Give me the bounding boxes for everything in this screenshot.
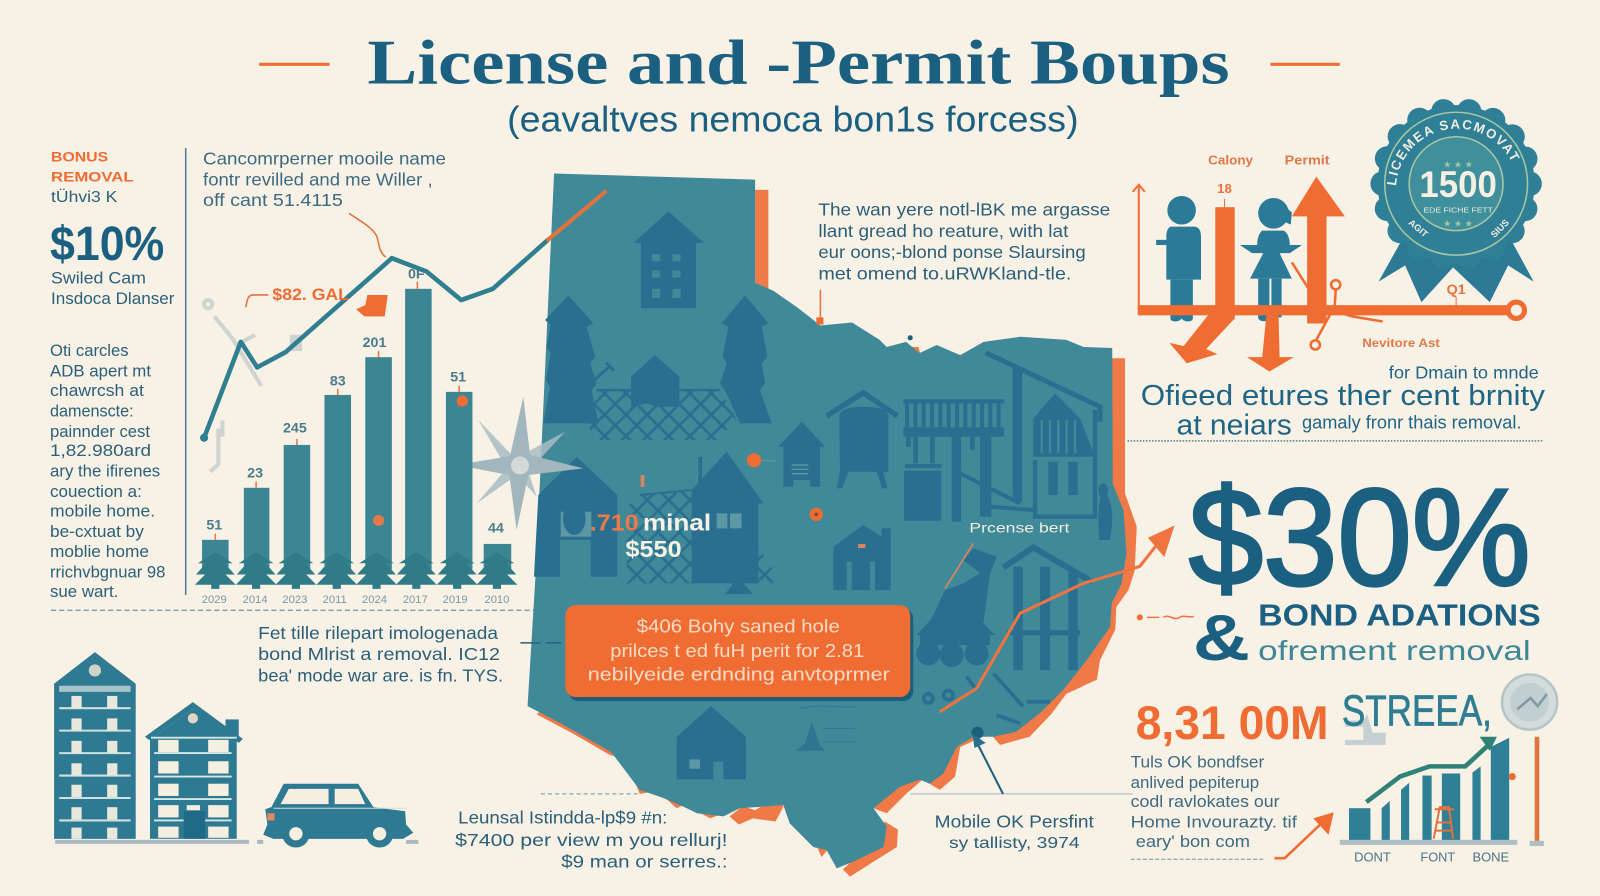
text block: fet tille: Fet tille rilepart imologenada [258,623,498,643]
orange pole [1530,737,1544,846]
mini chart dot [1509,773,1516,780]
left paragraph [50,342,165,601]
illustration: apartment house [145,702,243,839]
year labels: 2019 [443,594,468,606]
seal stars [1443,159,1473,229]
orange bar with down arrow [1169,207,1235,363]
structure: slat frame [903,368,1022,522]
text block: for dmain: for Dmain to mnde [1389,363,1539,383]
bar value labels: 201 [363,335,386,351]
year labels: 2014 [243,594,268,606]
map label: minal: .710 [590,510,639,536]
seal bottom labels: SIUS [1489,217,1511,240]
bar value labels: 0F [408,267,425,283]
text block: for dmain: gamaly fronr thais removal. [1302,412,1521,433]
trend line [200,192,605,442]
bar chart [195,267,517,606]
bar value labels: 245 [283,421,307,437]
big up arrow [1292,177,1345,324]
text block: mobile ok: sy tallisty, 3974 [949,835,1080,852]
left paragraph: painnder cest [50,423,150,441]
text block: for dmain: at neiars [1177,410,1292,442]
text block: mobile ok [935,812,1094,852]
map label: minal: $550 [626,536,682,562]
left paragraph: couection a: [50,483,142,501]
tree row under bars [195,552,517,589]
illustration: car [263,784,413,847]
stamp [1502,675,1557,730]
left paragraph: damenscte: [50,402,134,420]
dash connector to box [520,642,561,644]
seal stars: ★ ★ ★ [1443,159,1473,169]
year labels [202,594,509,606]
illustration: tall building [54,652,136,839]
map label: prcense bert: Prcense bert [969,521,1069,537]
chart intro text [203,148,446,210]
label: 18 [1217,181,1232,207]
stat caption: Insdoca Dlanser [51,290,175,308]
left paragraph: mobile home. [50,502,155,520]
mini chart labels: FONT [1420,849,1455,864]
map of state [528,174,1127,868]
seal [1383,110,1530,257]
seal sub text: EDE FICHE FETT [1423,206,1494,214]
left paragraph: rrichvbgnuar 98 [50,564,165,582]
diagonal accent [945,543,973,588]
left paragraph: chawrcsh at [50,382,144,400]
fence lattice upper [580,390,737,440]
text block: tuls ok: anlived pepiterup [1131,774,1259,792]
bar value labels [206,267,504,537]
icon: house lower [692,452,763,594]
structure: gantry beam [986,353,1100,422]
callout tick [816,290,823,325]
orange callout box: prilces t ed fuH perit for 2.81 [610,640,864,661]
bar value labels: 51 [206,518,222,534]
left paragraph: 1,82.980ard [50,442,151,460]
compass star [457,397,583,530]
mini chart labels: DONT [1354,849,1391,864]
text block: right of map: eur oons;-blond ponse Slaursing [818,242,1086,262]
bars [202,289,511,570]
callout: $82 gal: $82. GAL [272,286,349,304]
icon: house bottom [677,706,746,779]
big stat: 30 percent: $30% [1189,461,1531,615]
label: permit: Permit [1285,152,1330,167]
ribbon tails [1379,219,1534,302]
bar value labels: 83 [330,374,346,390]
text block: leunsal: $9 man or serres.: [561,851,728,871]
bar value ticks [215,282,459,540]
callout: $82 gal [246,286,388,316]
left paragraph: ary the ifirenes [50,463,160,481]
icon: tree left [543,295,598,423]
bonus removal label [51,149,134,206]
text block: right of map: llant gread ho reature, with lat [818,221,1069,241]
bar value labels: 44 [488,521,504,537]
year labels: 2011 [323,594,347,606]
subtitle: (eavaltves nemoca bon1s forcess) [507,100,1079,140]
year labels: 2024 [362,594,387,606]
seal bottom labels [1407,217,1511,240]
map marker dots [747,335,913,521]
ring end [1508,302,1524,318]
arrow: mobile ok pointer [971,727,1003,794]
diagram: people and arrows [1133,152,1524,371]
faint house icon [1345,714,1386,745]
mini chart labels: BONE [1472,849,1509,864]
text block: tuls ok: Home Invourazty. tif [1131,814,1297,832]
year labels: 2017 [403,594,428,606]
icon: hut [778,422,825,487]
structure: gate [1003,547,1092,582]
stat: streea: STREEA, [1342,687,1492,736]
down arrow [1247,315,1294,371]
scissor connector [1292,262,1383,350]
left paragraph: be-cxtuat by [50,523,145,541]
ground line [55,840,418,844]
chart intro text: fontr revilled and me Willer , [203,170,433,190]
text block: leunsal [455,808,728,871]
mini chart labels [1354,849,1509,864]
faint figure behind chart [204,300,302,471]
mini chart trend arrow [1366,737,1497,802]
arrow to mini chart [1274,812,1334,858]
left paragraph: ADB apert mt [50,363,151,381]
person two [1240,198,1302,321]
year labels: 2029 [202,594,227,606]
orange callout box [565,605,913,701]
left paragraph: sue wart. [50,583,118,601]
map label: minal: minal [643,510,711,536]
lattice lower [627,490,692,583]
text block: right of map [818,199,1110,284]
text block: mobile ok: Mobile OK Persfint [935,812,1094,832]
left paragraph: moblie home [50,543,149,561]
scene: bottom map silhouettes [677,706,857,779]
text block: fet tille [258,623,503,686]
seal stars: ★ ★ ★ [1443,219,1473,229]
icon: barn [827,393,897,416]
stat caption [51,270,175,308]
seal number: 1500 [1419,164,1497,205]
text block: leunsal: $7400 per view m you rellurj! [455,830,728,850]
axis [1133,185,1145,310]
seal bottom labels: AGIT [1407,217,1430,239]
chart dots [373,395,468,526]
icon: small house [631,355,679,407]
text block: fet tille: bea' mode war are. is fn. TYS. [258,666,503,686]
orange callout box: $406 Bohy saned hole [637,616,840,637]
text block: tuls ok: Tuls OK bondfser [1131,753,1265,771]
label: nevitore ast: Nevitore Ast [1362,336,1440,350]
orange callout box: nebilyeide erdnding anvtoprmer [588,664,890,685]
stat: 10 percent: $10% [50,218,164,271]
map orange edge [537,190,1137,877]
bar value labels: 23 [247,466,263,482]
person silhouette [1098,483,1112,540]
text block: for dmain: Ofieed etures ther cent brnity [1141,380,1546,412]
stat: 8.31 00M: 8,31 00M [1136,697,1329,749]
bonus removal label: tÜhvi3 K [51,188,118,206]
chart intro text: Cancomrperner mooile name [203,148,446,168]
year labels: 2023 [282,594,307,606]
map label: minal [590,510,711,562]
mini chart base [1340,840,1517,845]
dash connector [1137,614,1194,620]
scene: left map silhouettes [534,295,825,594]
left paragraph: Oti carcles [50,342,129,360]
badge [1370,99,1542,302]
panel: left column stats [50,149,175,601]
icon: tree right [720,295,772,423]
ofrement removal: ofrement removal [1258,635,1531,666]
horizontal bar [1138,305,1507,315]
callout line: top annotation [349,213,386,257]
text block: tuls ok: codl ravlokates our [1131,793,1280,811]
icon: bell [796,722,825,751]
icon: barn lower left [534,457,617,577]
stat caption: Swiled Cam [51,270,146,288]
text block: for dmain [1141,363,1546,442]
text block: tuls ok: eary' bon com [1136,833,1250,851]
title: License and -Permit Boups [367,28,1230,98]
orange arrow from map [940,526,1174,712]
bond adations: BOND ADATIONS [1258,599,1541,633]
seal arc text: LICEMEA SACMOVAT [1387,120,1520,186]
ampersand: & [1193,601,1250,674]
text block: leunsal: Leunsal Istindda-lp$9 #n: [458,808,667,828]
small orange mark [641,475,644,487]
label: q1 [1447,282,1466,309]
icon: hammer [595,363,614,379]
text block: right of map: The wan yere notl-lBK me argasse [818,199,1110,219]
bonus removal label: REMOVAL [51,170,134,186]
label: q1: Q1 [1447,282,1466,298]
structure: cage frame [1033,393,1095,457]
label: calony: Calony [1208,152,1254,167]
bonus removal label: BONUS [51,149,108,165]
icon: small house center [833,525,891,590]
icon: house top [634,211,704,308]
text block: right of map: met omend to.uRWKland-tle. [818,264,1071,284]
chart intro text: off cant 51.4115 [203,190,343,210]
figure with wheels [917,548,997,635]
year labels: 2010 [484,594,509,606]
mini bar chart [1340,737,1517,864]
text block: tuls ok [1131,753,1297,851]
bar value labels: 51 [450,370,466,386]
person one [1156,196,1201,321]
mini chart ladder [1434,807,1454,839]
text block: fet tille: bond Mlrist a removal. IC12 [258,644,500,664]
label: 18: 18 [1217,181,1232,196]
scene: right map silhouettes [827,353,1112,723]
